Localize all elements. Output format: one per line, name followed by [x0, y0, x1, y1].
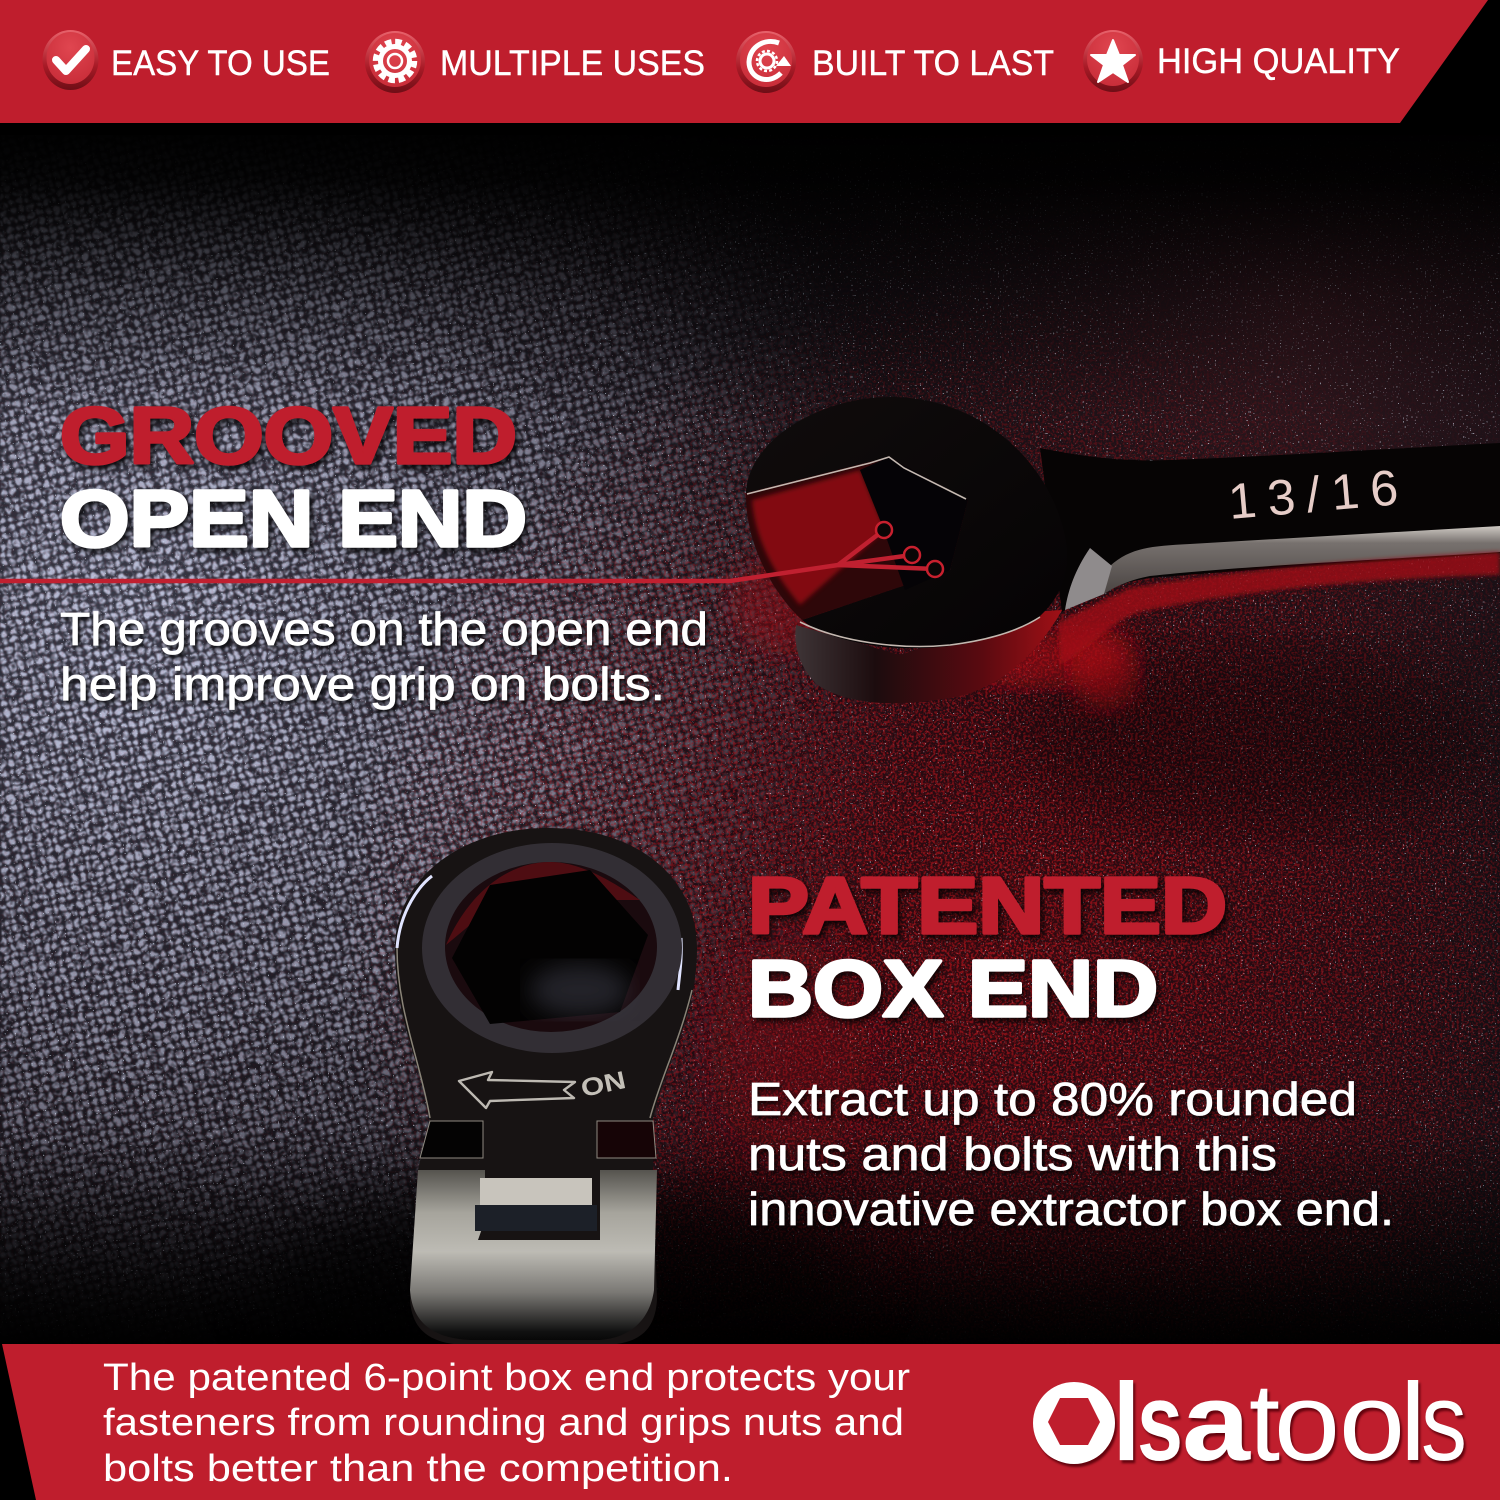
logo: Olsatools	[1030, 1361, 1467, 1486]
box head edge highlight	[397, 876, 681, 990]
jaw edge highlights	[747, 457, 1040, 646]
benefit: easy to use	[42, 30, 330, 90]
heading: patented box end: BOX END	[748, 944, 1158, 1033]
text block: box end summary	[103, 1357, 910, 1490]
ON engraving: ON	[578, 1066, 628, 1103]
wrench: patented box end	[395, 828, 697, 1345]
arrow engraving	[459, 1072, 575, 1108]
heading: grooved open end: GROOVED	[60, 391, 517, 480]
icon: check mark	[42, 30, 98, 90]
text block: box end description: Extract up to 80% rounded	[748, 1073, 1357, 1125]
logo: Olsatools: O	[1030, 1363, 1118, 1486]
benefit: high quality: HIGH QUALITY	[1157, 42, 1400, 81]
benefit: built to last	[736, 31, 1054, 93]
ring	[422, 843, 682, 1053]
text block: box end summary: bolts better than the competition.	[103, 1448, 733, 1490]
logo: Olsatools: o	[1339, 1361, 1405, 1484]
callout line with groove markers	[0, 522, 943, 581]
benefit: built to last: BUILT TO LAST	[812, 44, 1054, 83]
heading: patented box end: PATENTED	[748, 861, 1227, 950]
icon: gear	[365, 31, 425, 93]
lower jaw side	[795, 610, 1062, 703]
size marking: 13/16	[1226, 459, 1400, 530]
logo: Olsatools: l	[1400, 1361, 1426, 1484]
jaw shadow facet	[860, 457, 968, 590]
jaw interior showing red surface	[746, 457, 968, 620]
text block: open end description: help improve grip on bolts.	[60, 658, 665, 710]
surface seen through hole	[530, 964, 630, 1016]
logo: Olsatools: s	[1137, 1361, 1183, 1484]
wrench handle	[1040, 443, 1500, 612]
handle chrome strip	[1104, 526, 1500, 594]
text block: box end description	[748, 1073, 1394, 1235]
hexagon hole	[452, 870, 648, 1024]
logo: Olsatools: s	[1421, 1361, 1467, 1484]
chrome block	[410, 1170, 657, 1340]
socket opening	[445, 862, 657, 1032]
logo: Olsatools: a	[1182, 1361, 1251, 1484]
text block: open end description	[60, 603, 708, 710]
text block: box end summary: fasteners from rounding and grips nuts and	[103, 1402, 904, 1444]
icon: star	[1083, 30, 1143, 92]
top banner	[0, 0, 1500, 135]
wrench head face	[746, 397, 1067, 648]
text block: open end description: The grooves on the open end	[60, 603, 708, 655]
icon: cycle gear	[736, 31, 796, 93]
text block: box end description: nuts and bolts with this	[748, 1128, 1277, 1180]
text block: box end description: innovative extractor box end.	[748, 1183, 1394, 1235]
background: textured dark surface	[0, 150, 1500, 1336]
logo: Olsatools: l	[1113, 1361, 1140, 1484]
heading: grooved open end: OPEN END	[60, 474, 527, 563]
benefit: easy to use: EASY TO USE	[111, 44, 330, 83]
heading: grooved open end	[60, 391, 527, 563]
hinge	[480, 1178, 592, 1205]
logo: Olsatools: o	[1274, 1361, 1340, 1484]
benefit: multiple uses: MULTIPLE USES	[440, 44, 705, 83]
benefit: multiple uses	[365, 31, 705, 93]
box head body	[395, 828, 697, 1345]
benefit: high quality	[1083, 30, 1400, 92]
heading: patented box end	[748, 861, 1227, 1033]
bottom banner	[0, 1344, 1500, 1500]
red glow under handle	[1058, 552, 1500, 665]
text block: box end summary: The patented 6-point box end protects your	[103, 1357, 910, 1399]
wrench: grooved open end with 13/16 handle	[0, 397, 1500, 703]
neck notches	[420, 1121, 483, 1158]
logo: Olsatools: t	[1249, 1361, 1280, 1484]
